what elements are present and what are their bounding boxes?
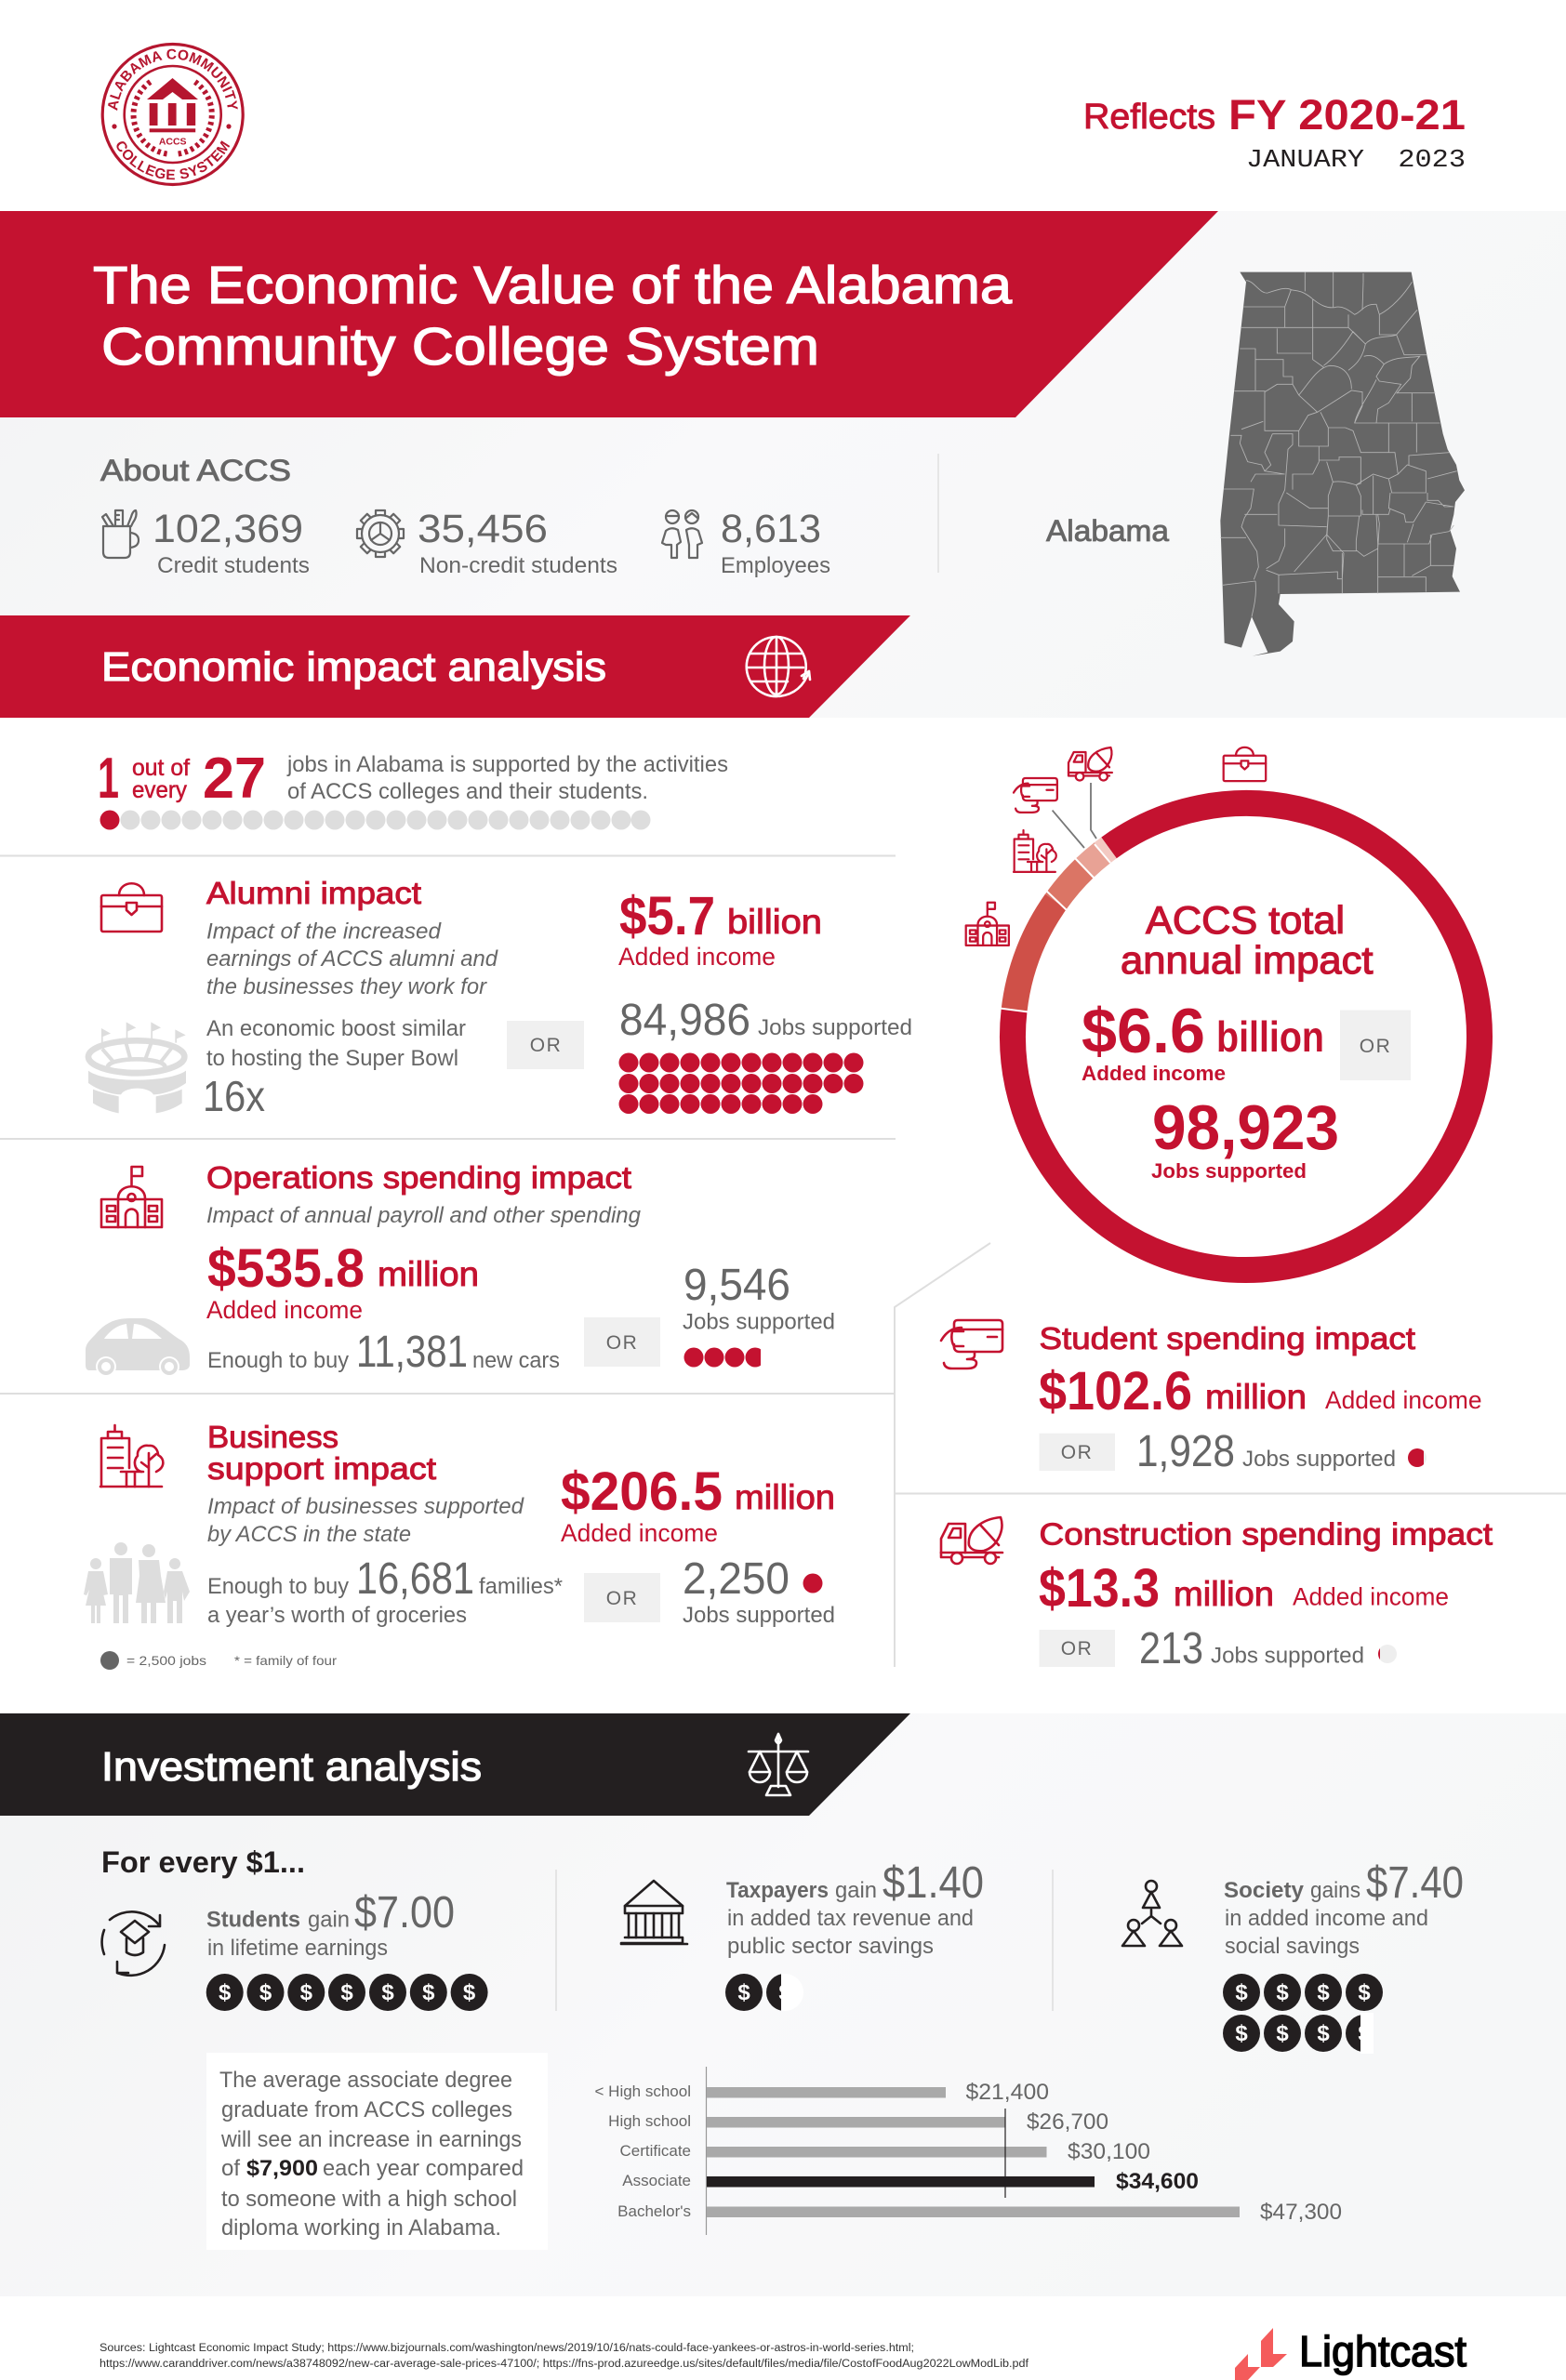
- bar: certificate: $30,100: [1068, 2139, 1150, 2164]
- icon: family: [84, 1542, 190, 1623]
- stat: credit students: 102,369: [153, 507, 303, 551]
- title banner: The Economic Value of the Alabama: [93, 256, 1012, 315]
- alumni heading: Alumni impact: [206, 876, 421, 910]
- dots: operations jobs: [684, 1348, 764, 1367]
- new cars comparison: new cars: [472, 1348, 560, 1373]
- logo: ACCS seal: [100, 43, 245, 186]
- legend: * = family of four: [234, 1653, 337, 1668]
- or badge: OR: [1061, 1442, 1093, 1463]
- stat: employees: 8,613: [721, 507, 821, 551]
- society stat: gains: [1310, 1878, 1360, 1903]
- donut center text: Added income: [1082, 1062, 1226, 1085]
- coins: society: $: [1317, 1980, 1330, 2005]
- coins: society: $: [1358, 1980, 1371, 2005]
- or badge: OR: [1061, 1638, 1093, 1659]
- business added income: $206.5: [561, 1461, 723, 1522]
- stat: 1 out of every 27: jobs in Alabama is supported by the activities: [286, 752, 728, 777]
- students stat: Students: [206, 1908, 300, 1933]
- stat: 1 out of every 27: 1: [98, 747, 119, 811]
- coins: students: $: [381, 1980, 394, 2005]
- icon: graduate cycle: [102, 1911, 165, 1976]
- construction jobs: 213: [1139, 1624, 1203, 1673]
- about heading: About ACCS: [100, 454, 291, 487]
- donut chart: total annual impact: [966, 747, 1480, 1270]
- students stat: in lifetime earnings: [207, 1936, 388, 1961]
- panel: alumni impact: [88, 876, 912, 1120]
- new cars comparison: Enough to buy: [207, 1348, 349, 1373]
- report year: [1083, 91, 1466, 139]
- or badge: [584, 1317, 660, 1367]
- panel: operations spending impact: [86, 1160, 835, 1377]
- society stat: [1224, 1858, 1464, 1959]
- report year: FY 2020-21: [1228, 91, 1466, 139]
- bar: associate: $34,600: [1116, 2169, 1199, 2194]
- coins: students: [206, 1974, 488, 2011]
- alumni description: [206, 919, 498, 999]
- background panel: investment analysis: [0, 1713, 1566, 2296]
- bar: certificate: [619, 2139, 1150, 2164]
- or badge: OR: [530, 1035, 562, 1056]
- alumni description: earnings of ACCS alumni and: [206, 946, 498, 972]
- society stat: in added income and: [1225, 1906, 1428, 1931]
- business heading: [207, 1420, 436, 1486]
- stat: 1 out of every 27: 27: [203, 747, 266, 811]
- operations added income: $535.8: [207, 1238, 365, 1299]
- icon: scales: [749, 1734, 808, 1795]
- coins: society: $: [1317, 2021, 1330, 2046]
- stat: credit students: Credit students: [157, 553, 310, 578]
- icon: gear: [357, 510, 404, 557]
- bar: less than high school: [595, 2080, 1049, 2105]
- title banner: [0, 211, 1218, 417]
- logo: ACCS seal: ALABAMA COMMUNITY: [108, 48, 238, 111]
- icon: cement truck: [941, 1517, 1002, 1564]
- icon: stadium: [88, 1022, 186, 1113]
- society stat: Society: [1224, 1878, 1305, 1903]
- icon: briefcase: [101, 883, 162, 932]
- coins: society: $: [1276, 1980, 1289, 2005]
- panel: construction spending impact: [941, 1517, 1493, 1673]
- operations jobs: 9,546: [683, 1261, 790, 1310]
- donut center text: OR: [1360, 1036, 1391, 1057]
- icon: ring building: [1014, 830, 1056, 872]
- business description: Impact of businesses supported: [207, 1494, 524, 1519]
- legend: [100, 1651, 337, 1670]
- coins: society: [1223, 1974, 1383, 2054]
- stat: credit students: [153, 507, 310, 578]
- callout: associate degree earnings: will see an increase in earnings: [220, 2127, 522, 2152]
- icon: ring card in hand: [1014, 778, 1057, 813]
- operations added income: million: [378, 1255, 479, 1293]
- or badge: [507, 1021, 584, 1069]
- alumni added income: [618, 886, 822, 971]
- panel: about ACCS: [100, 454, 830, 578]
- report date: JANUARY 2023: [1246, 147, 1466, 175]
- callout: associate degree earnings: $7,900: [246, 2156, 318, 2181]
- bar: bachelor's: $47,300: [1260, 2200, 1342, 2225]
- student jobs: [1139, 1435, 1427, 1473]
- taxpayers stat: in added tax revenue and: [727, 1906, 974, 1931]
- business added income: million: [735, 1478, 835, 1516]
- logo: Lightcast: Lightcast: [1299, 2327, 1466, 2375]
- coins: students: $: [463, 1980, 476, 2005]
- business heading: Business: [207, 1420, 338, 1454]
- construction heading: Construction spending impact: [1040, 1517, 1493, 1552]
- bar: certificate: Certificate: [619, 2142, 691, 2160]
- stat: employees: [721, 507, 830, 578]
- alumni added income: $5.7: [619, 886, 715, 946]
- super bowl comparison: to hosting the Super Bowl: [206, 1046, 458, 1071]
- or badge: [1040, 1630, 1115, 1667]
- bar: associate: [622, 2169, 1199, 2194]
- operations jobs: [683, 1261, 835, 1335]
- taxpayers stat: public sector savings: [727, 1934, 934, 1959]
- student added income: $102.6: [1039, 1361, 1192, 1421]
- donut center text: [1082, 898, 1411, 1183]
- icon: society network: [1122, 1881, 1182, 1946]
- operations added income: [206, 1238, 479, 1324]
- coins: taxpayers: $: [737, 1980, 750, 2005]
- coins: students: $: [422, 1980, 435, 2005]
- alumni jobs: [619, 996, 912, 1045]
- icon: ring truck: [1068, 747, 1112, 781]
- icon: bank: [621, 1881, 687, 1944]
- bar chart: earnings by education: [595, 2067, 1342, 2235]
- bar: less than high school: $21,400: [965, 2080, 1049, 2105]
- donut center text: Jobs supported: [1151, 1159, 1307, 1183]
- coins: students: $: [219, 1980, 232, 2005]
- callout: associate degree earnings: [206, 2053, 548, 2250]
- operations jobs: Jobs supported: [683, 1309, 835, 1335]
- callout: associate degree earnings: to someone with a high school: [221, 2187, 517, 2212]
- business jobs: 2,250: [683, 1554, 790, 1604]
- icon: cup of pencils: [102, 510, 139, 558]
- stat: non-credit students: 35,456: [418, 507, 548, 551]
- icon: card in hand: [941, 1320, 1002, 1368]
- banner: investment analysis: Investment analysis: [101, 1744, 482, 1790]
- business heading: support impact: [207, 1451, 436, 1486]
- legend: = 2,500 jobs: [126, 1653, 206, 1668]
- business jobs: [683, 1562, 833, 1627]
- donut center text: $6.6: [1082, 996, 1205, 1066]
- or badge: OR: [606, 1332, 638, 1354]
- panel: society gains: [1122, 1858, 1464, 2054]
- map: Alabama counties: [1220, 272, 1465, 656]
- construction added income: [1039, 1558, 1449, 1619]
- panel: taxpayers gain: [621, 1858, 984, 2011]
- icon: ring briefcase: [1224, 747, 1266, 781]
- bar: high school: [608, 2109, 1108, 2135]
- panel: business support impact: [84, 1420, 835, 1670]
- logo: ACCS seal: COLLEGE SYSTEM: [116, 140, 231, 180]
- coins: society: $: [1235, 1980, 1248, 2005]
- groceries comparison: a year’s worth of groceries: [207, 1603, 467, 1628]
- coins: students: $: [259, 1980, 272, 2005]
- alumni jobs: 84,986: [619, 996, 750, 1045]
- alumni jobs: Jobs supported: [758, 1015, 912, 1040]
- or badge: [584, 1573, 660, 1622]
- construction added income: million: [1174, 1575, 1274, 1613]
- callout: associate degree earnings: graduate from ACCS colleges: [221, 2097, 512, 2122]
- banner: economic impact analysis: Economic impact analysis: [101, 644, 606, 690]
- groceries comparison: Enough to buy: [207, 1574, 349, 1599]
- background panel: about: [0, 211, 1566, 718]
- new cars comparison: 11,381: [356, 1328, 468, 1377]
- dot row: 1 of 27 jobs: [100, 811, 651, 829]
- donut center text: billion: [1216, 1012, 1324, 1061]
- icon: ring school: [966, 903, 1009, 945]
- panel: students gain: [102, 1888, 488, 2011]
- stat: non-credit students: [418, 507, 617, 578]
- banner: investment analysis: [0, 1713, 910, 1816]
- stat: non-credit students: Non-credit students: [419, 553, 617, 578]
- student heading: Student spending impact: [1040, 1321, 1415, 1355]
- coins: students: $: [300, 1980, 313, 2005]
- alumni description: the businesses they work for: [206, 974, 487, 999]
- bar: associate: Associate: [622, 2172, 691, 2189]
- stat: 1 out of every 27: of ACCS colleges and their students.: [287, 779, 648, 804]
- icon: school: [101, 1167, 162, 1227]
- coins: taxpayers: [725, 1974, 781, 2011]
- coins: society: $: [1235, 2021, 1248, 2046]
- stat: 1 out of every 27: out of: [132, 755, 190, 781]
- stat: 1 out of every 27: [98, 747, 728, 811]
- operations description: Impact of annual payroll and other spending: [206, 1203, 642, 1228]
- business description: by ACCS in the state: [207, 1522, 411, 1547]
- groceries comparison: [207, 1554, 563, 1628]
- construction added income: $13.3: [1039, 1558, 1160, 1619]
- groceries comparison: families*: [479, 1574, 563, 1599]
- map label: Alabama: Alabama: [1046, 514, 1169, 548]
- business added income: [561, 1461, 835, 1547]
- alumni added income: billion: [727, 903, 822, 941]
- taxpayers stat: [726, 1858, 984, 1959]
- logo: ACCS seal: ACCS: [159, 136, 187, 147]
- bar: bachelor's: [617, 2200, 1342, 2225]
- icon: employees: [662, 510, 702, 558]
- student jobs: Jobs supported: [1242, 1447, 1396, 1472]
- coins: students: $: [340, 1980, 353, 2005]
- new cars comparison: [207, 1328, 560, 1377]
- operations added income: Added income: [206, 1296, 363, 1324]
- report year: Reflects: [1083, 98, 1215, 137]
- logo: Lightcast: [1235, 2327, 1466, 2380]
- title banner: Community College System: [101, 317, 819, 377]
- coins: society: $: [1358, 2021, 1371, 2046]
- coins: society: $: [1276, 2021, 1289, 2046]
- dot grid: alumni jobs: [619, 1052, 863, 1114]
- students stat: gain: [308, 1908, 350, 1933]
- banner: economic impact analysis: [0, 615, 910, 718]
- donut center text: annual impact: [1121, 938, 1374, 982]
- panel: student spending impact: [941, 1320, 1482, 1476]
- or badge: OR: [606, 1588, 638, 1609]
- groceries comparison: 16,681: [356, 1554, 474, 1604]
- alumni description: Impact of the increased: [206, 919, 442, 945]
- super bowl comparison: An economic boost similar: [206, 1016, 466, 1041]
- student added income: million: [1205, 1378, 1307, 1416]
- operations heading: Operations spending impact: [206, 1160, 631, 1195]
- taxpayers stat: $1.40: [883, 1858, 984, 1908]
- sources: [100, 2343, 1029, 2370]
- heading: for every $1: For every $1...: [101, 1845, 305, 1879]
- students stat: [206, 1888, 455, 1961]
- business added income: Added income: [561, 1519, 718, 1547]
- alumni added income: Added income: [618, 943, 776, 971]
- icon: globe: [747, 637, 810, 696]
- stat: 1 out of every 27: every: [132, 777, 187, 803]
- callout: associate degree earnings: each year compared: [323, 2156, 524, 2181]
- business description: [207, 1494, 524, 1547]
- society stat: social savings: [1225, 1934, 1360, 1959]
- student added income: Added income: [1325, 1386, 1482, 1414]
- bar: high school: $26,700: [1027, 2109, 1108, 2135]
- callout: associate degree earnings: diploma working in Alabama.: [221, 2215, 501, 2241]
- icon: car: [86, 1318, 190, 1377]
- bar: less than high school: < High school: [595, 2082, 691, 2100]
- super bowl comparison: 16x: [203, 1072, 265, 1120]
- callout: associate degree earnings: of: [221, 2156, 240, 2181]
- coins: taxpayers: $: [778, 1980, 791, 2005]
- sources: https://www.caranddriver.com/news/a38748092/new-car-average-sale-prices-47100/; https://fns-prod.azureedge.us/sites/default/files/media/file/CostofFoodAug2022LowModLib.pdf: [100, 2359, 1029, 2370]
- construction jobs: [1141, 1633, 1397, 1668]
- super bowl comparison: [203, 1016, 466, 1120]
- icon: business building: [100, 1425, 163, 1487]
- bar: high school: High school: [608, 2112, 691, 2130]
- donut center text: 98,923: [1152, 1092, 1339, 1163]
- bar: bachelor's: Bachelor's: [617, 2202, 691, 2220]
- students stat: $7.00: [354, 1888, 455, 1937]
- sources: Sources: Lightcast Economic Impact Study; https://www.bizjournals.com/washington/news/2019/10/16/nats-could-face-yankees-or-astros-in-world-series.html;: [100, 2343, 914, 2354]
- taxpayers stat: Taxpayers: [726, 1878, 829, 1903]
- student added income: [1039, 1361, 1482, 1421]
- donut center text: ACCS total: [1146, 898, 1345, 942]
- society stat: $7.40: [1366, 1858, 1464, 1908]
- construction jobs: Jobs supported: [1211, 1644, 1364, 1668]
- stat: employees: Employees: [721, 553, 830, 578]
- or badge: [1040, 1434, 1115, 1471]
- callout: associate degree earnings: The average associate degree: [219, 2068, 512, 2093]
- student jobs: 1,928: [1136, 1427, 1235, 1476]
- business jobs: Jobs supported: [683, 1603, 835, 1628]
- construction added income: Added income: [1293, 1582, 1449, 1610]
- taxpayers stat: gain: [835, 1878, 877, 1903]
